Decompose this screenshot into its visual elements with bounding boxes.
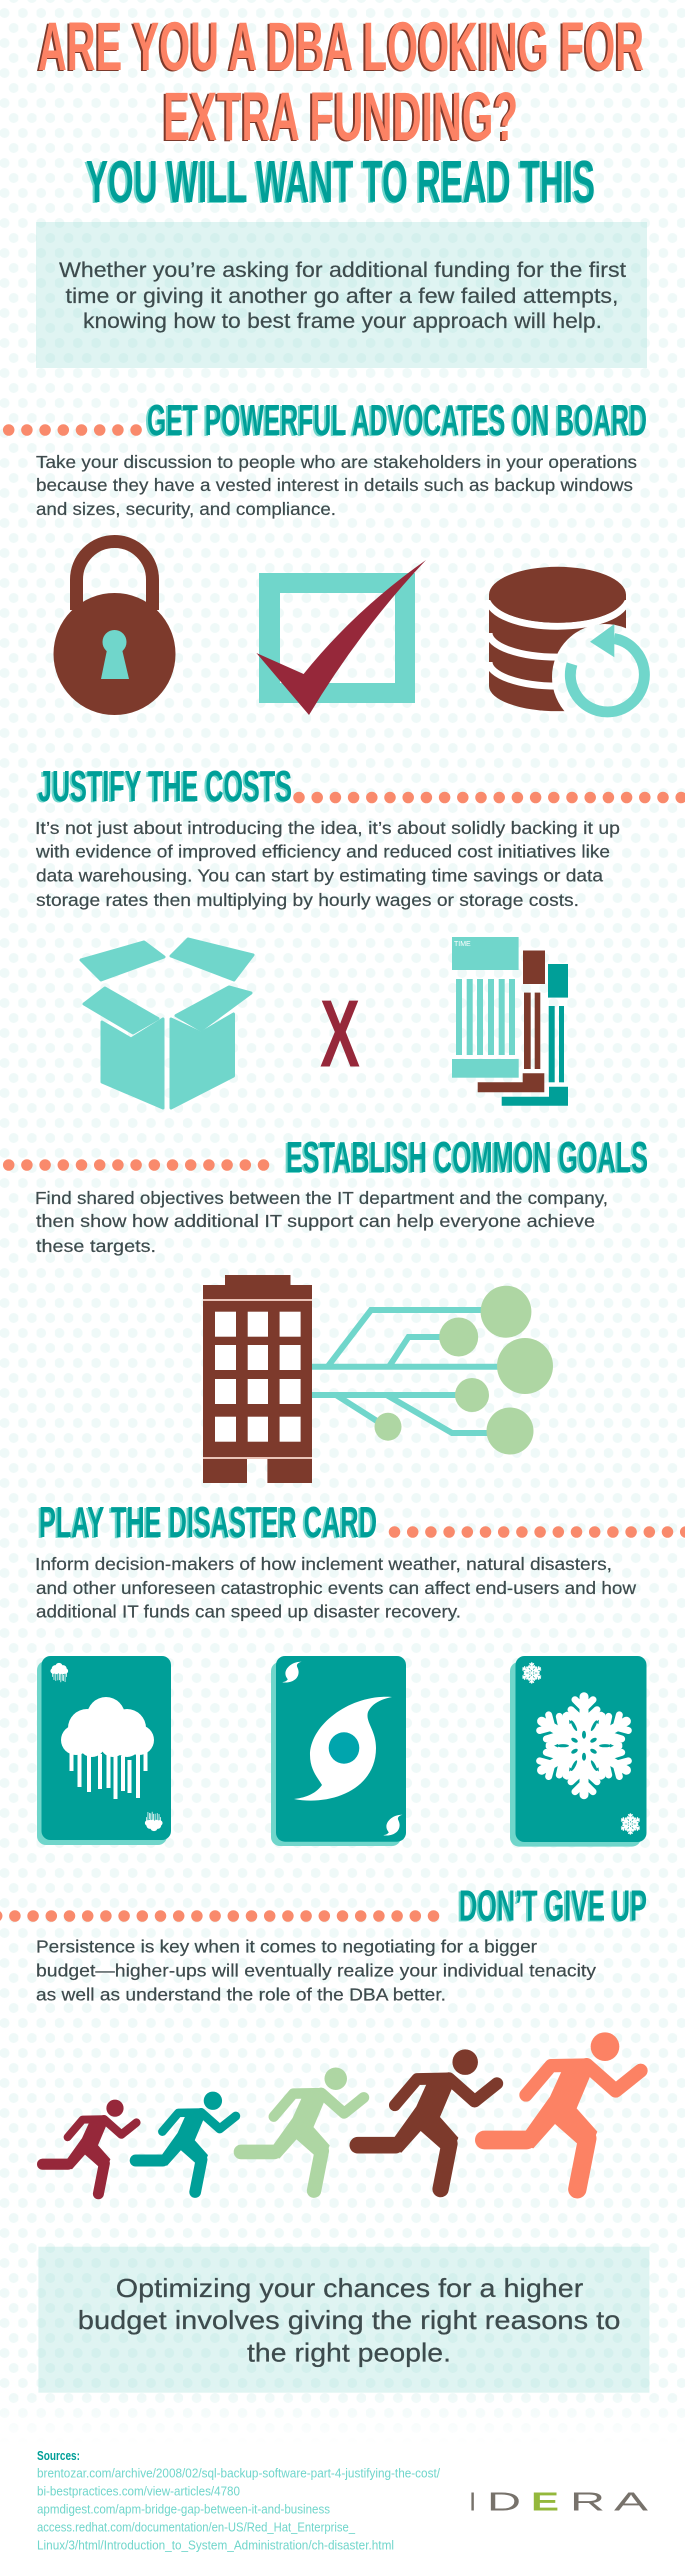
section: common goals [9, 1133, 648, 1483]
logo: IDERA: D [487, 2487, 521, 2517]
text: costs body: with evidence of improved efficiency and reduced cost initiatives like [35, 842, 610, 862]
text: goals body: Find shared objectives between the IT department and the company, [35, 1188, 608, 1208]
brown time sheet [478, 950, 545, 1092]
panel: conclusion: Optimizing your chances for a higher [116, 2273, 584, 2303]
title [38, 8, 644, 155]
text: costs body: data warehousing. You can start by estimating time savings or data [36, 866, 603, 886]
section: advocates [9, 396, 647, 715]
text: persistence body: Persistence is key when it comes to negotiating for a bigger [36, 1937, 537, 1957]
sources list: Linux/3/html/Introduction_to_System_Administration/ch-disaster.html [37, 2538, 394, 2552]
text: persistence body: budget—higher-ups will eventually realize your individual tenacity [36, 1961, 596, 1981]
heading: justify the costs: JUSTIFY THE COSTS [38, 762, 292, 811]
logo: IDERA: E [531, 2487, 559, 2517]
icon: green runner [241, 2067, 364, 2191]
dark teal time sheet [502, 964, 568, 1106]
text: disaster body: Inform decision-makers of how inclement weather, natural disasters, [35, 1554, 612, 1574]
text: persistence body: as well as understand the role of the DBA better. [36, 1985, 446, 2005]
panel: conclusion: the right people. [247, 2338, 451, 2368]
light teal time sheet [452, 937, 519, 1078]
multiply sign: X [320, 980, 360, 1088]
logo: IDERA: I [469, 2487, 476, 2517]
panel: intro [36, 222, 647, 368]
section: don't give up [0, 1882, 647, 2194]
icon: checkbox with check mark [256, 560, 426, 715]
text: disaster body [35, 1554, 636, 1622]
sources list: brentozar.com/archive/2008/02/sql-backup-software-part-4-justifying-the-cost/ [37, 2467, 440, 2481]
text: disaster body: and other unforeseen catastrophic events can affect end-users and how [36, 1578, 636, 1598]
logo: IDERA: A [614, 2487, 649, 2517]
panel: conclusion: budget involves giving the right reasons to [78, 2305, 620, 2335]
icon: teal runner [136, 2092, 236, 2192]
text: goals body: then show how additional IT support can help everyone achieve [36, 1211, 595, 1231]
text: advocates body [36, 452, 637, 519]
sources list: Sources: [37, 2448, 80, 2463]
panel: intro: Whether you’re asking for additional funding for the first [59, 259, 626, 282]
text: advocates body: because they have a vested interest in details such as backup windows [36, 475, 633, 495]
text: costs body [35, 818, 620, 910]
panel: intro: knowing how to best frame your approach will help. [83, 310, 602, 333]
network goal circles [374, 1286, 553, 1454]
sources list: apmdigest.com/apm-bridge-gap-between-it-and-business [37, 2503, 330, 2517]
text: advocates body: Take your discussion to people who are stakeholders in your operations [36, 452, 637, 472]
network connector lines [312, 1310, 500, 1433]
sources list: access.redhat.com/documentation/en-US/Red_Hat_Enterprise_ [37, 2521, 356, 2535]
icon: orange runner [484, 2032, 641, 2189]
text: disaster body: additional IT funds can speed up disaster recovery. [36, 1602, 461, 1622]
panel: intro: time or giving it another go after a few failed attempts, [66, 285, 618, 308]
text: costs body: storage rates then multiplying by hourly wages or storage costs. [36, 890, 579, 910]
icon: open box [81, 939, 253, 1108]
text: costs body: It’s not just about introducing the idea, it’s about solidly backing it up [35, 818, 620, 838]
icon: database backup [489, 567, 644, 712]
icon: padlock [54, 542, 176, 715]
icon: brown runner [358, 2049, 497, 2189]
card: snowflake [510, 1656, 646, 1847]
panel: conclusion [38, 2247, 649, 2393]
text: goals body: these targets. [36, 1236, 156, 1256]
heading: play the disaster card: PLAY THE DISASTER CARD [39, 1498, 377, 1547]
logo: IDERA: R [570, 2487, 605, 2517]
icon: crimson runner [43, 2100, 136, 2194]
icon: office building [203, 1275, 312, 1483]
sources list [37, 2448, 440, 2552]
card: rain cloud [37, 1656, 171, 1845]
text: persistence body [36, 1937, 596, 2005]
section: disaster card [35, 1498, 685, 1847]
text: goals body [35, 1188, 608, 1256]
icon: time sheets [452, 937, 568, 1106]
section: justify the costs [35, 762, 685, 1108]
sources list: bi-bestpractices.com/view-articles/4780 [37, 2485, 240, 2499]
text: advocates body: and sizes, security, and compliance. [36, 499, 336, 519]
logo: IDERA [469, 2487, 649, 2517]
card: hurricane [271, 1656, 406, 1846]
light teal time sheet: TIME [454, 941, 471, 948]
